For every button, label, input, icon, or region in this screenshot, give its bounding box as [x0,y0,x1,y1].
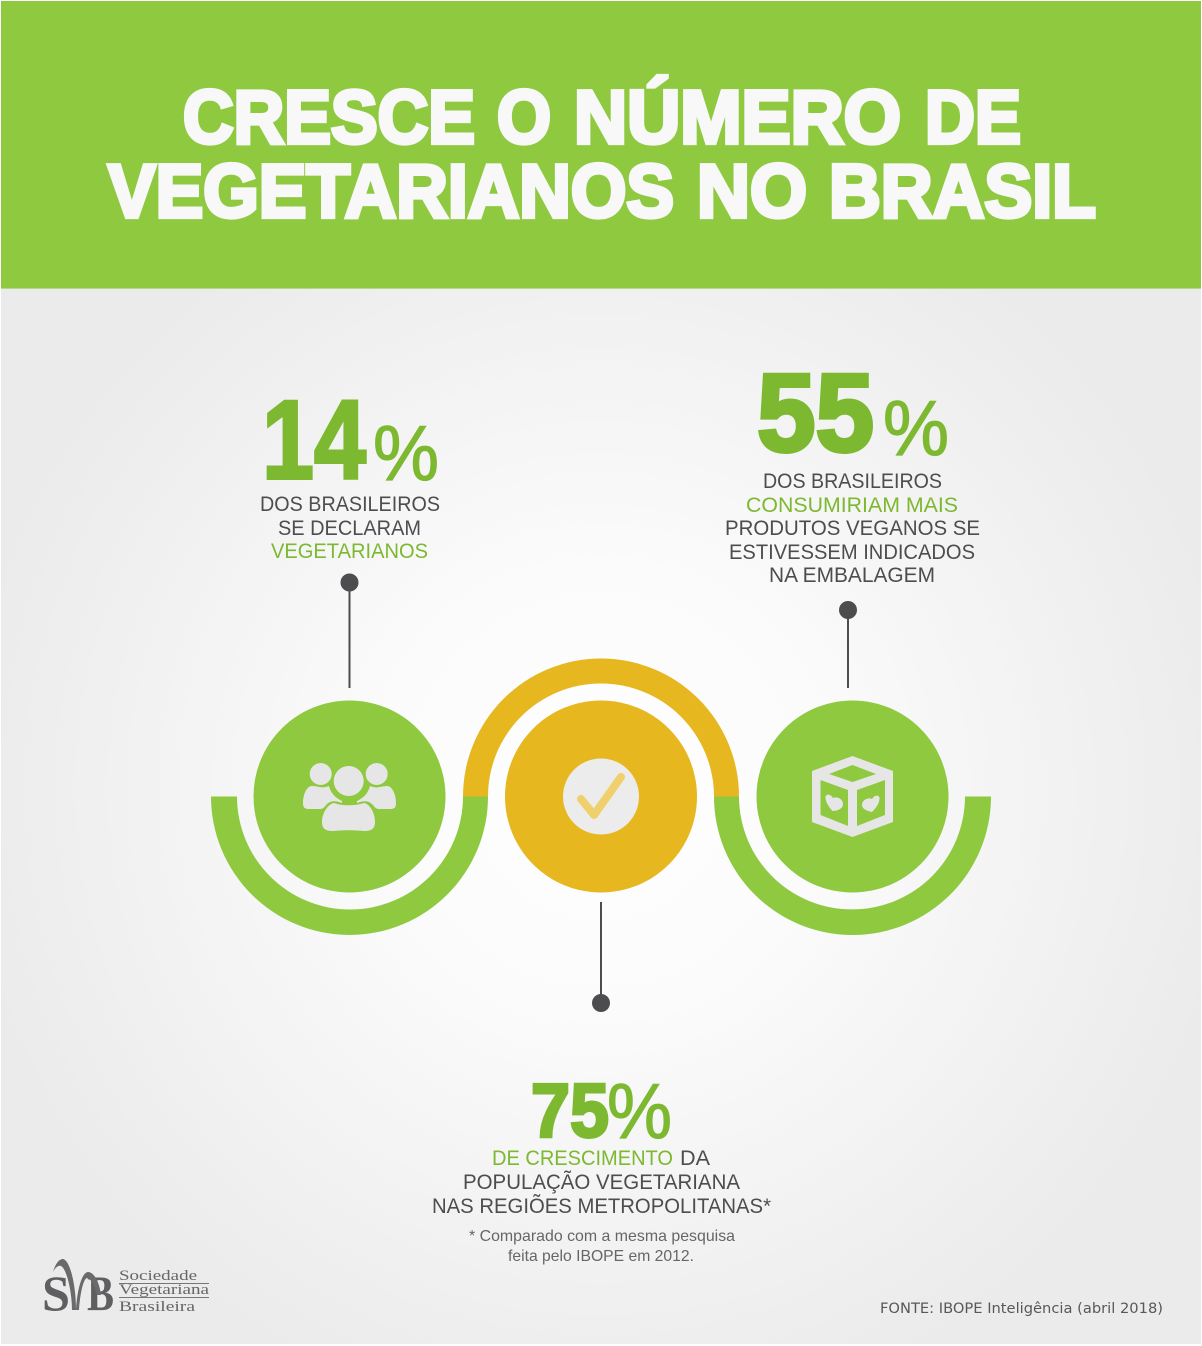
stat: 14%: % [373,409,439,497]
header band [1,1,1201,289]
stat: 14%: DOS BRASILEIROS [260,493,440,516]
connector: 75% [592,902,610,1012]
stat: 55%: CONSUMIRIAM MAIS [746,494,958,517]
footnote [469,1228,735,1265]
logo: Sociedade Vegetariana Brasileira: Sociedade [119,1268,197,1284]
logo: Sociedade Vegetariana Brasileira: Vegetariana [119,1282,209,1298]
background panel [1,289,1201,1344]
stat: 55%: PRODUTOS VEGANOS SE [725,517,980,540]
title: DE [925,75,1021,159]
logo: Sociedade Vegetariana Brasileira: Brasileira [119,1299,195,1315]
title: VEGETARIANOS [108,149,674,233]
stat: 14% [260,378,440,563]
logo: Sociedade Vegetariana Brasileira: S [42,1265,70,1321]
icon: check mark [563,758,639,834]
icon: box with hearts [812,756,893,837]
stat: 55% [725,352,980,587]
stat: 55%: ESTIVESSEM INDICADOS [729,541,975,564]
logo: Sociedade Vegetariana Brasileira: B [87,1265,114,1321]
stat: 14%: VEGETARIANOS [271,540,428,563]
arc: yellow top [463,658,739,796]
stat: 75%: NAS REGIÕES METROPOLITANAS* [432,1194,771,1218]
stat: 14%: SE DECLARAM [278,517,421,540]
icon: people [303,763,396,831]
stat: 55%: DOS BRASILEIROS [763,470,942,493]
stat: 75%: POPULAÇÃO VEGETARIANA [463,1170,740,1194]
connector: 55% [839,601,857,688]
title: BRASIL [829,149,1096,233]
title: O [497,75,551,159]
circle: check [505,700,697,892]
title: CRESCE [183,75,475,159]
stat: 55%: 55 [757,352,874,475]
stat: 14%: 14 [262,378,366,502]
stat: 55%: % [883,384,949,472]
stat: 75%: % [607,1067,672,1155]
stat: 75%: 75 [531,1069,609,1154]
stat: 75% [432,1067,771,1218]
stat: 55%: NA EMBALAGEM [769,564,935,587]
circle: people [254,700,446,892]
title: NO [697,149,807,233]
logo: Sociedade Vegetariana Brasileira [42,1259,209,1321]
connector: 14% [340,574,358,688]
stat: 75%: DE CRESCIMENTO [492,1147,673,1170]
title [108,75,1096,233]
stat: 75%: DA [680,1147,710,1170]
title: NÚMERO [574,75,901,159]
footnote: feita pelo IBOPE em 2012. [508,1248,694,1265]
arc: green left [211,796,488,935]
arc: green right [714,796,991,935]
footnote: * Comparado com a mesma pesquisa [469,1228,735,1245]
circle: box [756,700,948,892]
source credit: FONTE: IBOPE Inteligência (abril 2018) [880,1301,1163,1317]
